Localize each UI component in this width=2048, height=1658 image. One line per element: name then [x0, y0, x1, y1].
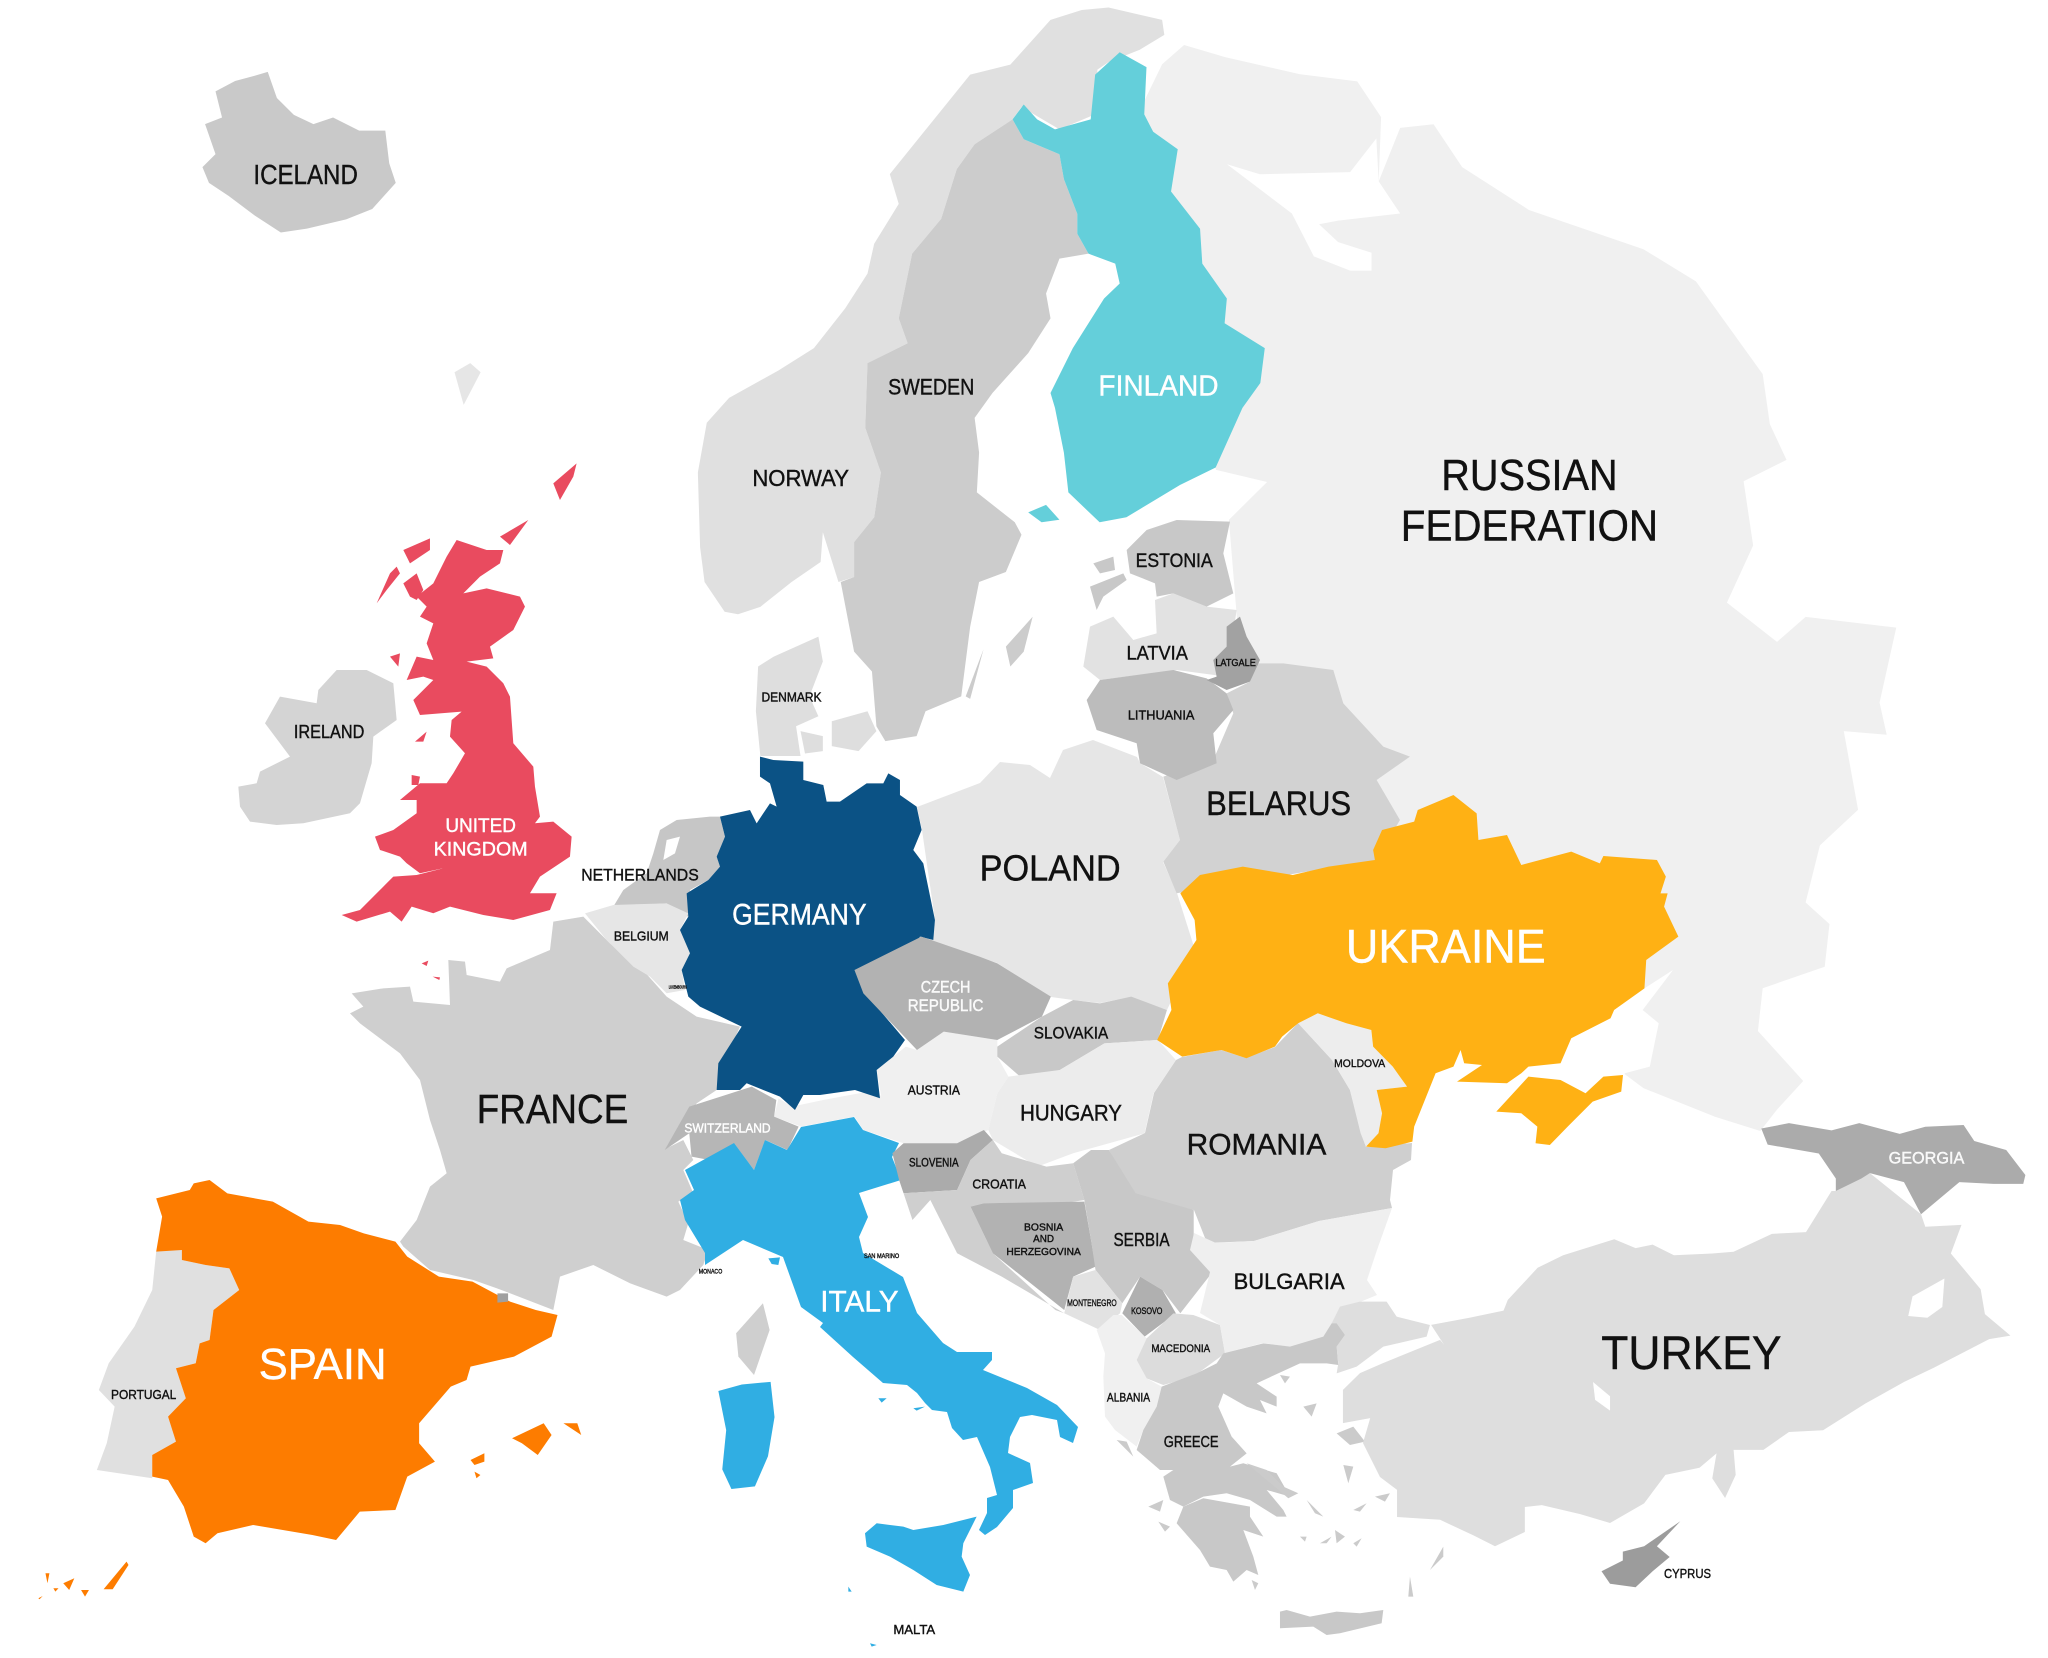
- label: Malta: MALTA: [893, 1622, 935, 1637]
- label: Bosnia and Herzegovina: HERZEGOVINA: [1006, 1247, 1081, 1258]
- Latgale: [1207, 617, 1260, 690]
- label: Cyprus: CYPRUS: [1664, 1566, 1711, 1581]
- Croatia: [904, 1140, 1084, 1313]
- label: Russian Federation: RUSSIAN: [1441, 452, 1618, 500]
- label: Netherlands: NETHERLANDS: [581, 865, 699, 884]
- label: United Kingdom: [434, 815, 528, 860]
- label: Czech Republic: CZECH: [921, 978, 970, 997]
- Germany: [680, 757, 935, 1110]
- Czech Republic: [854, 937, 1051, 1050]
- Sweden: [841, 119, 1088, 741]
- United Kingdom: [342, 540, 572, 922]
- Cyprus: [1602, 1521, 1680, 1587]
- label: Moldova: MOLDOVA: [1334, 1058, 1386, 1070]
- label: Estonia: ESTONIA: [1136, 550, 1214, 572]
- label: Russian Federation: FEDERATION: [1401, 503, 1658, 551]
- Belgium: [585, 903, 690, 993]
- label: Czech Republic: REPUBLIC: [908, 996, 983, 1015]
- label: Slovenia: SLOVENIA: [909, 1156, 959, 1169]
- Portugal: [97, 1248, 239, 1478]
- Turkey: [1343, 1173, 2010, 1546]
- label: Lithuania: LITHUANIA: [1128, 708, 1195, 723]
- France: [350, 917, 740, 1310]
- label: Finland: FINLAND: [1098, 371, 1219, 403]
- label: Romania: ROMANIA: [1187, 1129, 1326, 1162]
- Bosnia and Herzegovina: [971, 1202, 1096, 1310]
- Crimea: [1496, 1075, 1623, 1145]
- Bulgaria: [1190, 1208, 1392, 1353]
- Latvia: [1083, 593, 1237, 680]
- Hungary: [988, 1040, 1176, 1167]
- Channel Islands: [422, 961, 440, 980]
- Sea of Azov: [1561, 970, 1673, 1092]
- label: Portugal: PORTUGAL: [111, 1387, 176, 1402]
- label: Bosnia and Herzegovina: BOSNIA: [1024, 1222, 1063, 1233]
- Andorra: [497, 1293, 508, 1303]
- Albania: [1097, 1315, 1162, 1447]
- Belarus: [1163, 663, 1410, 893]
- Greek islands: [1117, 1375, 1443, 1597]
- Greece: [1137, 1323, 1345, 1517]
- Georgia: [1761, 1123, 2025, 1214]
- label: Iceland: ICELAND: [253, 159, 358, 190]
- Kosovo: [1122, 1277, 1176, 1337]
- label: Albania: ALBANIA: [1107, 1391, 1150, 1404]
- White Sea: [1227, 139, 1400, 271]
- Lithuania: [1087, 670, 1233, 780]
- label: United Kingdom: KINGDOM: [434, 838, 528, 860]
- Switzerland: [665, 1087, 799, 1170]
- label: Austria: AUSTRIA: [908, 1083, 960, 1098]
- Canary Islands: [38, 1562, 129, 1599]
- Serbia: [1073, 1150, 1212, 1313]
- label: Georgia: GEORGIA: [1889, 1149, 1965, 1168]
- label: Macedonia: MACEDONIA: [1151, 1343, 1211, 1355]
- label: Turkey: TURKEY: [1601, 1326, 1782, 1379]
- Balearic Islands: [471, 1423, 581, 1478]
- label: Croatia: CROATIA: [972, 1177, 1026, 1192]
- label: Poland: POLAND: [980, 847, 1121, 888]
- label: Belarus: BELARUS: [1206, 785, 1351, 823]
- Estonia: [1127, 520, 1233, 607]
- Finland: [1013, 52, 1265, 522]
- label: Hungary: HUNGARY: [1020, 1101, 1122, 1126]
- label: Belgium: BELGIUM: [614, 928, 669, 943]
- label: Monaco: MONACO: [699, 1268, 722, 1275]
- Romania: [1109, 1023, 1412, 1243]
- label: Denmark: DENMARK: [761, 689, 822, 704]
- Italy: [680, 1117, 1078, 1535]
- Crete: [1280, 1610, 1383, 1635]
- Ireland: [238, 670, 397, 825]
- Estonian islands: [1090, 557, 1127, 610]
- Netherlands: [613, 817, 725, 917]
- Macedonia: [1137, 1313, 1225, 1385]
- label: Italy: ITALY: [820, 1285, 899, 1318]
- label: Norway: NORWAY: [752, 465, 849, 491]
- label: Luxembourg: LUXEMBOURG: [669, 985, 687, 990]
- label: Czech Republic: [908, 978, 983, 1015]
- Slovakia: [997, 997, 1167, 1080]
- Montenegro: [1064, 1270, 1122, 1330]
- Sicily: [865, 1517, 977, 1592]
- Faroe Islands: [455, 363, 481, 405]
- Spain: [152, 1180, 558, 1543]
- label: Germany: GERMANY: [732, 899, 867, 932]
- label: France: FRANCE: [477, 1086, 628, 1132]
- Moldova: [1298, 1013, 1407, 1147]
- Norway: [698, 7, 1164, 614]
- Poland: [917, 740, 1195, 1010]
- label: Bulgaria: BULGARIA: [1234, 1269, 1345, 1294]
- Corsica: [736, 1303, 770, 1375]
- label: Bosnia and Herzegovina: [1006, 1222, 1081, 1258]
- label: Kosovo: KOSOVO: [1131, 1306, 1162, 1316]
- label: Ukraine: UKRAINE: [1346, 920, 1546, 973]
- Ukraine: [1157, 795, 1678, 1148]
- label: Russian Federation: [1401, 452, 1658, 551]
- lakes in Turkey: [1593, 1278, 1944, 1411]
- label: Sweden: SWEDEN: [888, 374, 974, 399]
- Sardinia: [718, 1382, 775, 1489]
- Peloponnese: [1177, 1498, 1263, 1582]
- Russian Federation: [1130, 45, 1896, 1131]
- Slovenia: [892, 1130, 993, 1193]
- Gotland and Oland: [966, 617, 1033, 699]
- label: Bosnia and Herzegovina: AND: [1033, 1234, 1054, 1245]
- small Italian islands: [768, 1257, 925, 1647]
- Denmark: [756, 637, 876, 756]
- label: Switzerland: SWITZERLAND: [684, 1120, 771, 1135]
- label: Greece: GREECE: [1164, 1434, 1219, 1451]
- label: United Kingdom: UNITED: [445, 815, 516, 837]
- label: Montenegro: MONTENEGRO: [1067, 1298, 1117, 1308]
- IJsselmeer: [663, 837, 680, 860]
- label: Latvia: LATVIA: [1127, 643, 1189, 665]
- label: Ireland: IRELAND: [294, 721, 364, 742]
- Aland Islands: [1028, 505, 1059, 522]
- British islands: [377, 463, 577, 785]
- label: San Marino: SAN MARINO: [864, 1253, 899, 1260]
- Iceland: [202, 72, 396, 232]
- label: Slovakia: SLOVAKIA: [1034, 1023, 1109, 1042]
- label: Serbia: SERBIA: [1113, 1229, 1170, 1250]
- European Turkey: [1332, 1302, 1430, 1373]
- label: Spain: SPAIN: [259, 1341, 387, 1389]
- label: Latgale: LATGALE: [1215, 658, 1256, 669]
- Austria: [774, 1032, 1008, 1143]
